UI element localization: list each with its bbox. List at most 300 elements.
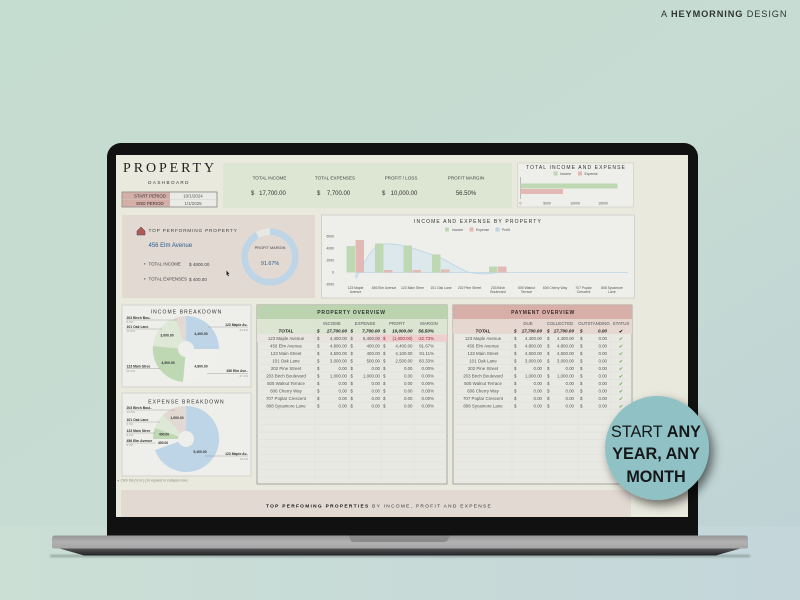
note: collapse rows: ◂ Click the [+] or [-] to expand or collapse rows — [117, 478, 188, 482]
pie labels: 203 Birch Bou.. — [126, 316, 151, 320]
table rows: 3,000.00 — [557, 358, 575, 364]
table rows: $ — [350, 388, 354, 394]
table rows: 4,800.00 — [525, 344, 543, 348]
pie labels — [126, 316, 248, 378]
panel: top performing property: TOTAL INCOME — [148, 262, 181, 266]
table rows: $ — [580, 388, 583, 394]
table rows: $ — [547, 396, 550, 401]
table rows: $ — [514, 374, 517, 378]
pie chart: expense: 400.00 — [158, 441, 168, 445]
bottom banner — [121, 490, 631, 517]
table rows: $ — [350, 358, 354, 364]
table rows: 456 Elm Avenue — [467, 344, 500, 348]
table rows: $ — [547, 388, 550, 394]
table rows: $ — [580, 351, 583, 356]
table: property overview: PROPERTY OVERVIEW — [317, 310, 386, 316]
category labels: Lane — [608, 290, 616, 294]
table rows: $ — [580, 374, 583, 378]
table rows: 0.00 — [404, 396, 413, 401]
table rows: $ — [317, 336, 320, 341]
panel: top performing property: $ 400.00 — [189, 277, 207, 282]
totals row: 10,000.00 — [392, 328, 413, 334]
table rows: 2,500.00 — [395, 358, 413, 364]
table rows: $ — [383, 404, 386, 408]
table rows: 0.00 — [338, 404, 348, 408]
table rows: $ — [580, 358, 583, 364]
table rows — [463, 336, 623, 410]
table rows: 606 Cherry Way — [270, 388, 303, 394]
table: payment overview — [453, 305, 632, 484]
table rows: 91.67% — [419, 344, 434, 348]
table rows: 0.00 — [533, 388, 543, 394]
totals row: 17,700.00 — [522, 328, 542, 334]
table rows: 0.00 — [598, 366, 608, 371]
table rows: 4,500.00 — [330, 351, 348, 356]
KPI: total income: 17,700.00 — [259, 191, 287, 197]
legend: Expense — [584, 172, 598, 176]
table rows: $ — [350, 366, 354, 371]
table rows: 0.00 — [371, 381, 381, 386]
table rows: 3,000.00 — [330, 358, 348, 364]
table rows: $ — [350, 396, 354, 401]
table rows: $ — [350, 374, 354, 378]
table rows: $ — [514, 388, 517, 394]
table rows: $ — [317, 366, 320, 371]
legend — [554, 172, 598, 176]
panel: top performing property — [122, 215, 315, 298]
totals row: $ — [513, 328, 517, 334]
pie labels: 456 Elm Ave.. — [226, 369, 248, 373]
panel: income breakdown: INCOME BREAKDOWN — [151, 310, 222, 316]
laptop — [50, 143, 750, 557]
KPI: total income: TOTAL INCOME — [253, 176, 286, 180]
table rows: 0.00 — [598, 336, 608, 341]
table rows: 0.00 — [338, 381, 348, 386]
pie labels: 6.5% — [126, 422, 134, 426]
panel: top performing property: • — [144, 276, 146, 282]
total income and expense chart: 0 — [520, 202, 522, 206]
screen background — [116, 155, 688, 517]
table rows: $ — [350, 381, 354, 386]
laptop bezel — [107, 143, 698, 536]
KPI: profit loss — [382, 176, 418, 197]
table rows: 808 Sycamore Lane — [463, 404, 503, 408]
table rows: ✔ — [619, 404, 623, 410]
date range table: 10/1/2024 — [183, 194, 203, 199]
table rows: 202 Pine Street — [468, 366, 499, 371]
table rows: 0.00% — [422, 388, 434, 394]
table rows: $ — [514, 366, 517, 371]
table rows: ✔ — [619, 352, 623, 358]
table rows: $ — [317, 396, 320, 401]
title block — [123, 161, 217, 185]
income bar — [520, 184, 618, 188]
table rows: 203 Birch Boulevard — [463, 374, 503, 378]
laptop notch — [348, 536, 450, 542]
date range table: END PERIOD — [136, 201, 164, 206]
table rows: $ — [580, 396, 583, 401]
table rows: 0.00 — [338, 396, 348, 401]
KPI band — [223, 163, 512, 208]
title: PROPERTY — [123, 161, 217, 176]
pie chart: income: 3,000.00 — [160, 334, 174, 338]
pie labels: 101 Oak Lane — [126, 418, 148, 422]
totals row: 56.50% — [418, 328, 434, 334]
table rows: 0.00 — [565, 404, 575, 408]
laptop base shadow — [50, 555, 750, 557]
table rows: $ — [547, 358, 550, 364]
category labels: Terrace — [521, 290, 532, 294]
table rows: 0.00 — [338, 388, 348, 394]
table rows: $ — [580, 366, 583, 371]
table rows: 0.00% — [422, 381, 434, 386]
y axis: 0 — [332, 270, 334, 274]
table rows: 0.00 — [533, 396, 543, 401]
legend — [445, 228, 510, 232]
table rows: 101 Oak Lane — [469, 358, 497, 364]
panel: top performing property: TOP PERFORMING PROPERTY — [148, 228, 238, 234]
pie labels — [126, 406, 248, 461]
category labels: 606 Cherry Way — [543, 286, 567, 290]
KPI: profit margin — [448, 176, 484, 197]
KPI: profit loss: 10,000.00 — [391, 191, 418, 197]
category labels: 202 Pine Street — [458, 286, 481, 290]
category labels: 505 Walnut — [518, 286, 535, 290]
bottom banner: TOP PERFOMING PROPERTIES BY INCOME, PROFIT AND EXPENSE — [266, 504, 492, 510]
table rows: 3,000.00 — [525, 358, 543, 364]
category labels: 808 Sycamore — [601, 286, 623, 290]
category labels: Avenue — [350, 290, 361, 294]
table rows: $ — [383, 366, 386, 371]
totals row: $ — [316, 328, 320, 334]
table rows: 0.00 — [371, 396, 381, 401]
table rows: $ — [580, 344, 583, 348]
date range table: 1/1/2025 — [184, 201, 202, 206]
table rows: 0.00 — [598, 344, 608, 348]
pie labels: 5.6% — [126, 320, 134, 324]
callout badge: START ANY — [611, 423, 701, 441]
table rows: 0.00 — [598, 374, 608, 378]
table header — [453, 305, 632, 319]
totals row — [279, 328, 434, 334]
table rows: 707 Poplar Crescent — [463, 396, 504, 401]
table rows: $ — [317, 388, 320, 394]
table rows: $ — [547, 374, 550, 378]
category labels: 707 Poplar — [575, 286, 593, 290]
table rows: 0.00 — [565, 381, 575, 386]
table rows: $ — [547, 381, 550, 386]
table rows: 123 Maple Avenue — [268, 336, 305, 341]
table rows: ✔ — [619, 344, 623, 350]
totals row: 7,700.00 — [362, 328, 380, 334]
table rows: (1,000.00) — [392, 336, 413, 341]
callout badge: MONTH — [626, 468, 686, 486]
date range table: START PERIOD — [134, 194, 166, 199]
table rows: 0.00 — [598, 396, 608, 401]
KPI: profit margin: 56.50% — [456, 191, 477, 197]
pie labels: 123 Main Stree — [126, 364, 150, 368]
subtitle: DASHBOARD — [148, 180, 190, 185]
KPI: total income — [251, 176, 287, 197]
table rows: 0.00 — [404, 404, 413, 408]
table rows: $ — [580, 404, 583, 408]
table rows: 456 Elm Avenue — [270, 344, 303, 348]
total income and expense chart: TOTAL INCOME AND EXPENSE — [526, 165, 626, 171]
category labels: Boulevard — [490, 290, 506, 294]
table rows: ✔ — [619, 389, 623, 395]
legend: Profit — [502, 228, 510, 232]
table rows: $ — [350, 344, 354, 348]
table: payment overview: PAYMENT OVERVIEW — [511, 310, 575, 316]
table rows: 4,100.00 — [395, 351, 413, 356]
table rows: 0.00% — [422, 366, 434, 371]
table rows: 123 Main Street — [270, 351, 302, 356]
table rows: 0.00 — [404, 374, 413, 378]
pie chart: expense — [153, 406, 219, 472]
income bars — [346, 244, 498, 272]
table rows: 4,800.00 — [557, 344, 575, 348]
donut chart: profit margin: 91.67% — [261, 261, 279, 267]
table rows: $ — [383, 358, 386, 364]
total income and expense chart: 5000 — [543, 202, 551, 206]
KPI: total expenses: TOTAL EXPENSES — [315, 176, 355, 180]
table rows: $ — [350, 404, 354, 408]
totals row: $ — [579, 328, 583, 334]
totals row: TOTAL — [279, 328, 294, 334]
pie chart: income: 4,500.00 — [161, 361, 175, 365]
total income and expense chart: 15000 — [598, 202, 608, 206]
table rows: 4,400.00 — [395, 344, 413, 348]
expense bar — [520, 189, 563, 194]
table rows: 0.00 — [565, 388, 575, 394]
table rows: ✔ — [619, 396, 623, 402]
category labels: Crescent — [577, 290, 590, 294]
table rows: ✔ — [619, 366, 623, 372]
table rows: 0.00% — [422, 404, 434, 408]
table rows: 4,400.00 — [557, 336, 575, 341]
table rows: $ — [350, 351, 354, 356]
table rows: $ — [514, 336, 517, 341]
table rows: 123 Main Street — [468, 351, 499, 356]
bar chart: income and expense by property: INCOME AND EXPENSE BY PROPERTY — [414, 219, 542, 225]
panel: income breakdown — [122, 305, 251, 387]
KPI: profit loss: PROFIT / LOSS — [385, 176, 417, 180]
pie labels: 123 Maple Av.. — [225, 323, 248, 327]
totals row: 17,700.00 — [327, 328, 347, 334]
table rows: 505 Walnut Terrace — [464, 381, 502, 386]
table rows: $ — [383, 374, 386, 378]
category labels: 203 Birch — [491, 286, 505, 290]
table rows: 0.00 — [565, 396, 575, 401]
table rows: 1,000.00 — [557, 374, 575, 378]
KPI: profit margin: PROFIT MARGIN — [448, 176, 484, 180]
cursor — [226, 270, 230, 276]
total income and expense chart — [518, 163, 634, 207]
table rows: 0.00 — [533, 366, 543, 371]
y axis: -2000 — [325, 282, 334, 286]
bar chart: income and expense by property — [322, 215, 634, 298]
table rows: 202 Pine Street — [271, 366, 302, 371]
table rows: $ — [317, 351, 320, 356]
table rows: $ — [514, 358, 517, 364]
date range table — [122, 192, 217, 207]
pie labels: 456 Elm Avenue — [126, 439, 152, 443]
dashboard screen — [116, 155, 688, 517]
table header — [257, 305, 447, 319]
table rows: $ — [514, 351, 517, 356]
table: property overview: INCOME — [323, 321, 341, 326]
KPI: total expenses: $ — [317, 191, 321, 197]
table rows: 0.00 — [598, 351, 608, 356]
table rows: 0.00 — [598, 388, 608, 394]
totals row: 17,700.00 — [554, 328, 574, 334]
table rows: 4,500.00 — [557, 351, 575, 356]
table rows: 0.00 — [565, 366, 575, 371]
table: payment overview: STATUS — [613, 321, 629, 326]
table rows: 0.00 — [598, 404, 608, 408]
table rows: $ — [547, 404, 550, 408]
totals row: TOTAL — [476, 328, 491, 334]
table rows: $ — [350, 336, 354, 341]
totals row: $ — [382, 328, 386, 334]
table rows: 1,000.00 — [330, 374, 348, 378]
table rows: 5,400.00 — [363, 336, 381, 341]
panel: top performing property: 456 Elm Avenue — [148, 243, 193, 249]
table rows: $ — [514, 404, 517, 408]
table rows: 0.00 — [338, 366, 348, 371]
table rows: $ — [547, 336, 550, 341]
table rows: 0.00 — [598, 358, 608, 364]
donut chart: profit margin: PROFIT MARGIN — [255, 245, 286, 250]
table rows: ✔ — [619, 374, 623, 380]
table rows: 203 Birch Boulevard — [266, 374, 306, 378]
table rows: 4,400.00 — [525, 336, 543, 341]
legend: Income — [560, 172, 571, 176]
table rows: $ — [383, 381, 386, 386]
y axis: 6000 — [326, 234, 334, 238]
panel: top performing property: $ 4800.00 — [189, 262, 210, 267]
table rows: 505 Walnut Terrace — [267, 381, 305, 386]
pie labels: 203 Birch Boul.. — [126, 406, 152, 410]
panel: expense breakdown — [122, 393, 251, 476]
pie labels: 123 Maple Av.. — [225, 452, 248, 456]
pie labels: 123 Main Stree — [126, 429, 150, 433]
y axis — [325, 234, 334, 286]
table rows: 4,800.00 — [330, 344, 348, 348]
category labels — [348, 286, 623, 294]
table rows: 83.33% — [419, 358, 434, 364]
table rows: 4,400.00 — [330, 336, 348, 341]
laptop base lower edge — [58, 548, 742, 556]
table rows: 808 Sycamore Lane — [266, 404, 306, 408]
panel: expense breakdown: EXPENSE BREAKDOWN — [148, 400, 225, 406]
table rows: $ — [383, 388, 386, 394]
totals row — [476, 328, 623, 335]
KPI: total income: $ — [251, 191, 255, 197]
totals row: 0.00 — [598, 328, 607, 334]
table: property overview — [257, 305, 447, 484]
table rows: 1,000.00 — [363, 374, 381, 378]
table rows: 0.00% — [422, 396, 434, 401]
pie labels: 16.9% — [126, 329, 135, 333]
pie chart: income: 4,400.00 — [194, 332, 208, 336]
table rows: 0.00 — [598, 381, 608, 386]
table rows: 0.00 — [371, 404, 381, 408]
table rows: 0.00% — [422, 374, 434, 378]
category labels: 123 Maple — [348, 286, 364, 290]
KPI: total expenses — [315, 176, 355, 197]
totals row: $ — [350, 328, 354, 334]
table: payment overview: COLLECTED — [547, 321, 573, 326]
category labels: 101 Oak Lane — [430, 286, 452, 290]
table rows: $ — [547, 351, 550, 356]
pie labels: 25.4% — [126, 369, 135, 373]
donut chart: profit margin — [245, 232, 295, 282]
table rows: $ — [383, 336, 386, 341]
laptop base — [52, 536, 748, 548]
background floor — [0, 526, 800, 600]
y axis: 2000 — [326, 258, 334, 262]
table rows: 606 Cherry Way — [467, 388, 500, 394]
panel: top performing property: TOTAL EXPENSES — [148, 276, 187, 282]
table rows: 400.00 — [367, 351, 381, 356]
table rows: 91.11% — [419, 351, 434, 356]
pie chart: income — [153, 316, 219, 382]
table rows: $ — [317, 358, 320, 364]
table rows: $ — [383, 396, 386, 401]
table: property overview: PROFIT — [389, 321, 405, 326]
table rows: $ — [547, 366, 550, 371]
pie labels: 27.1% — [239, 374, 248, 378]
legend: Income — [452, 228, 463, 232]
table rows: -22.73% — [418, 336, 434, 341]
table rows: $ — [514, 396, 517, 401]
callout badge: YEAR, ANY — [612, 445, 700, 463]
brand credit: A HEYMORNING DESIGN — [661, 9, 787, 19]
table rows: $ — [580, 336, 583, 341]
category labels: 123 Main Stree — [401, 286, 424, 290]
table rows: $ — [317, 344, 320, 348]
table rows: 0.00 — [533, 381, 543, 386]
pie labels: 13.0% — [126, 410, 135, 414]
totals row: ✔ — [619, 329, 623, 335]
table rows: 0.00 — [371, 388, 381, 394]
profit area — [356, 244, 628, 278]
pie chart: expense: 400.00 — [159, 432, 169, 436]
table rows: $ — [383, 344, 386, 348]
pie labels: 101 Oak Lane — [126, 325, 148, 329]
table rows: $ — [580, 381, 583, 386]
table rows: ✔ — [619, 359, 623, 365]
table rows: 400.00 — [367, 344, 381, 348]
icon: house — [137, 227, 145, 235]
expense bars — [356, 240, 506, 272]
table rows: 0.00 — [371, 366, 381, 371]
table rows: $ — [514, 344, 517, 348]
panel: top performing property: • — [144, 262, 146, 266]
pie chart: income: 4,800.00 — [194, 364, 208, 368]
pie chart: expense: 1,000.00 — [170, 416, 184, 420]
KPI: profit loss: $ — [382, 191, 386, 197]
table: property overview: EXPENSE — [355, 321, 375, 326]
total income and expense chart: 10000 — [570, 202, 580, 206]
table rows: 123 Maple Avenue — [465, 336, 502, 341]
table rows: 0.00 — [404, 366, 413, 371]
table: payment overview: DUE — [523, 321, 533, 326]
table rows — [266, 336, 434, 408]
table rows: ✔ — [619, 382, 623, 388]
table rows: 101 Oak Lane — [272, 358, 300, 364]
